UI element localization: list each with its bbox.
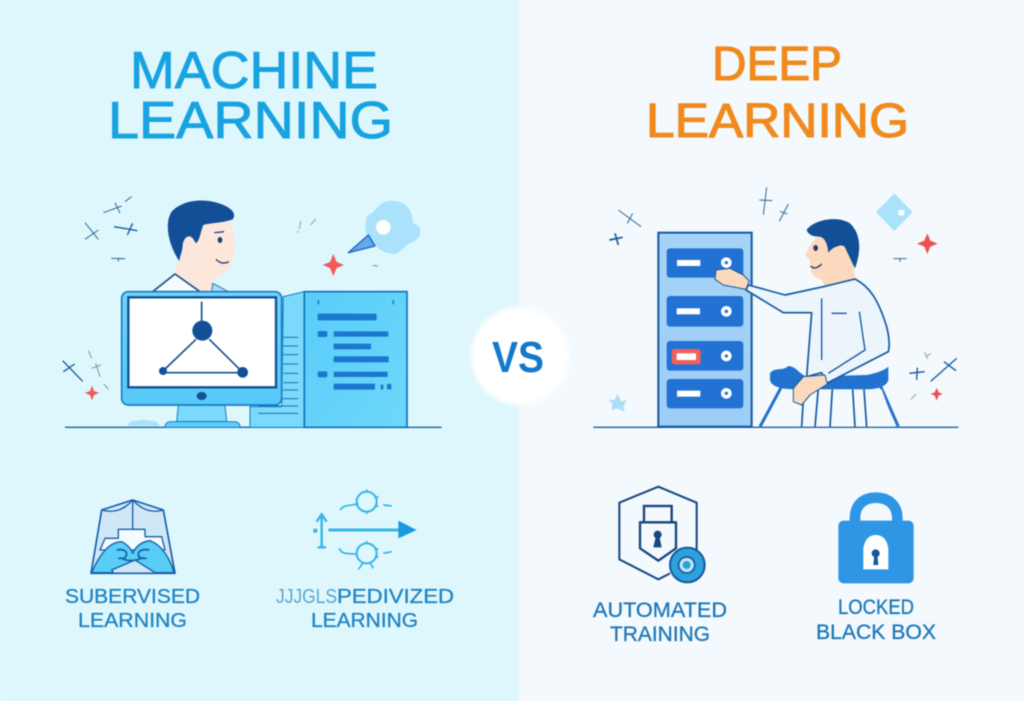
item: subervised learning: [65, 500, 200, 632]
network diagram: [159, 302, 248, 378]
ground line: [65, 425, 442, 429]
label: AUTOMATED: [593, 599, 727, 622]
label: [816, 596, 936, 644]
item: automated training: [593, 487, 727, 646]
label: PEDIVIZED: [337, 585, 454, 608]
illustration: person at server: [593, 187, 958, 427]
panel: machine learning background: [0, 0, 519, 701]
icon: red sparkles: [917, 233, 943, 401]
label: LEARNING: [78, 609, 187, 632]
server rack: [658, 233, 752, 427]
label: LEARNING: [311, 609, 418, 632]
ground line: [593, 425, 958, 429]
label: [65, 585, 200, 632]
decorative sparkles: [63, 197, 378, 389]
panel: deep learning background: [519, 0, 1024, 701]
icon: idea cloud and cone: [348, 201, 420, 254]
label: TRAINING: [610, 623, 710, 646]
label: JJJGLS: [276, 586, 337, 608]
soft keyboard shape: [128, 420, 159, 426]
icon: shield with lock and badge: [619, 487, 705, 582]
decorative sparkles: [609, 187, 957, 399]
computer tower: [250, 292, 407, 427]
icon: pale star: [609, 394, 627, 412]
item: jjjglspedivized learning: [276, 489, 454, 632]
title: machine learning: LEARNING: [108, 92, 393, 150]
icon: blue diamond: [876, 193, 913, 231]
icon: supervised learning: [91, 500, 175, 573]
title: machine learning: MACHINE: [130, 42, 378, 100]
label: [276, 585, 454, 632]
label: [593, 599, 727, 646]
icon: red sparkles: [85, 254, 344, 400]
item: locked black box: [816, 498, 936, 644]
title: deep learning: LEARNING: [646, 95, 909, 148]
label: BLACK BOX: [816, 621, 936, 644]
person: [153, 201, 235, 292]
title: deep learning: [646, 38, 909, 148]
title: machine learning: [108, 42, 393, 150]
title: deep learning: DEEP: [712, 38, 842, 91]
label: LOCKED: [838, 596, 914, 619]
person: [715, 219, 895, 427]
stool: [760, 366, 898, 427]
illustration: person at computer: [63, 197, 442, 427]
label: SUBERVISED: [65, 585, 200, 608]
badge: vs: [468, 304, 572, 408]
icon: padlock: [838, 498, 914, 583]
icon: arrows and gears: [313, 489, 417, 569]
monitor: [122, 292, 282, 427]
badge: vs: VS: [492, 333, 544, 382]
